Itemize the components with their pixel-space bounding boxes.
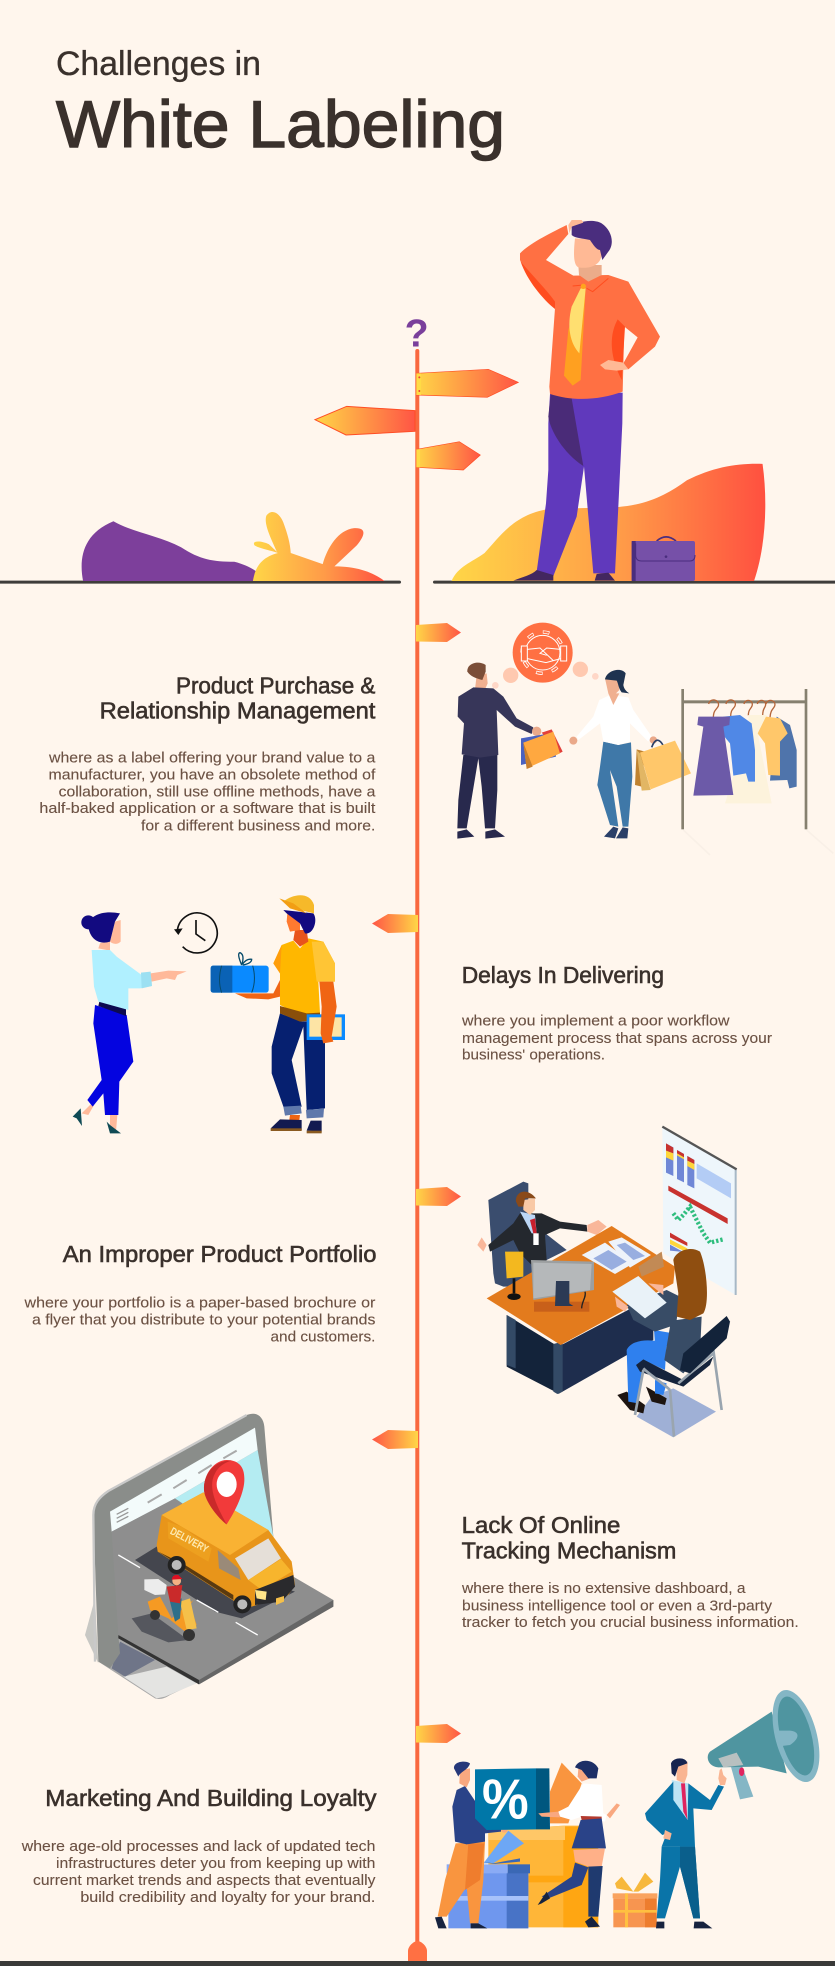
clothes rack [681,689,833,855]
man in suit [457,663,541,839]
illustration: office meeting [477,1127,737,1437]
percent board [475,1768,550,1832]
section 4 heading: Tracking Mechanism [462,1538,676,1564]
percent board: % [482,1769,529,1832]
illustration: marketing and loyalty [435,1685,828,1928]
title: White Labeling [56,87,505,161]
section 1 text: half-baked application or a software that is built [39,800,376,817]
section 2 text [461,1013,772,1063]
man [513,220,660,581]
section 5 text: build credibility and loyalty for your brand. [80,1889,375,1906]
section 2 text: management process that spans across your [462,1030,772,1047]
yellow shopping bag [635,740,691,791]
small gift [613,1873,657,1927]
icon: map pin [204,1460,244,1524]
section 1 text: manufacturer, you have an obsolete method of [48,766,376,783]
pointing hand [718,1768,727,1785]
hills background [82,464,765,581]
section 2 text: business' operations. [462,1046,605,1063]
section 4 heading: Lack Of Online [462,1512,620,1538]
section 5 text [21,1838,376,1906]
section 1 text: for a different business and more. [141,817,375,834]
van: DELIVERY [168,1525,210,1556]
large gift box [488,1826,598,1927]
section 3 text: where your portfolio is a paper-based brochure or [23,1294,375,1312]
section 5 text: where age-old processes and lack of updated tech [21,1838,375,1855]
sign arrow up right [416,369,518,397]
lamp [505,1252,523,1300]
papers [582,1237,664,1277]
ground line [0,581,835,584]
woman pointing [73,912,187,1133]
illustration: delivery van on laptop screen [85,1414,333,1699]
section 3 text: a flyer that you distribute to your potential brands [32,1312,375,1329]
section 1 text: collaboration, still use offline methods, have a [59,783,376,800]
thought bubbles [492,662,599,689]
sign arrow left [315,406,415,435]
briefcase [632,537,695,581]
megaphone [708,1685,828,1799]
section 4 text: business intelligence tool or even a 3rd-party [462,1597,773,1614]
illustration: thinking man and signpost [315,220,695,581]
section 4 heading [462,1512,676,1564]
section 1 text: where as a label offering your brand value to a [48,750,376,766]
gift box [211,953,280,999]
desk [487,1226,675,1394]
presentation board [662,1127,737,1295]
section 1 heading [100,673,376,724]
monitor [531,1260,594,1308]
scooter rider [132,1575,197,1642]
section 1 heading: Product Purchase & [176,673,375,699]
illustration: delivery delay [73,895,345,1133]
man in blue suit [645,1758,724,1928]
section marker 2 [372,914,418,933]
orange flag shape [550,1763,582,1823]
screen and road [110,1428,333,1684]
section 4 text [461,1580,799,1631]
section marker 4 [372,1430,418,1449]
section 5 text: current market trends and aspects that eventually [33,1872,376,1889]
blue gift box [447,1831,530,1928]
section 5 text: infrastructures deter you from keeping up with [56,1855,375,1872]
section 3 text [23,1294,375,1345]
section 2 text: where you implement a poor workflow [461,1013,730,1030]
device frame [85,1414,273,1699]
man holding percent sign [435,1762,508,1928]
shopping bags held by man [521,729,563,769]
section 4 text: where there is no extensive dashboard, a [461,1580,746,1597]
sign arrow small right [416,442,480,470]
woman jumping [538,1761,620,1927]
section 5 heading: Marketing And Building Loyalty [45,1785,377,1811]
title: Challenges in [56,45,261,83]
icon: history clock [174,913,217,953]
section 3 text: and customers. [270,1328,375,1345]
section marker 1 [416,623,461,642]
courier [271,895,345,1133]
question mark: ? [405,312,429,356]
van [157,1492,295,1613]
section 1 heading: Relationship Management [100,698,376,724]
woman [569,670,657,838]
bottom bar [0,1961,835,1966]
illustration: buyers and clothes rack [457,623,833,855]
title [56,45,505,161]
centre pole [408,349,427,1961]
section marker 3 [416,1187,461,1206]
handshake gear badge [513,623,573,683]
section 3 heading: An Improper Product Portfolio [63,1241,377,1267]
seated man [477,1182,607,1287]
section 1 text [39,750,376,834]
seated woman and chair [612,1249,730,1437]
section marker 5 [416,1724,461,1743]
section 4 text: tracker to fetch you crucial business information. [462,1614,799,1631]
section 2 heading: Delays In Delivering [462,962,664,988]
